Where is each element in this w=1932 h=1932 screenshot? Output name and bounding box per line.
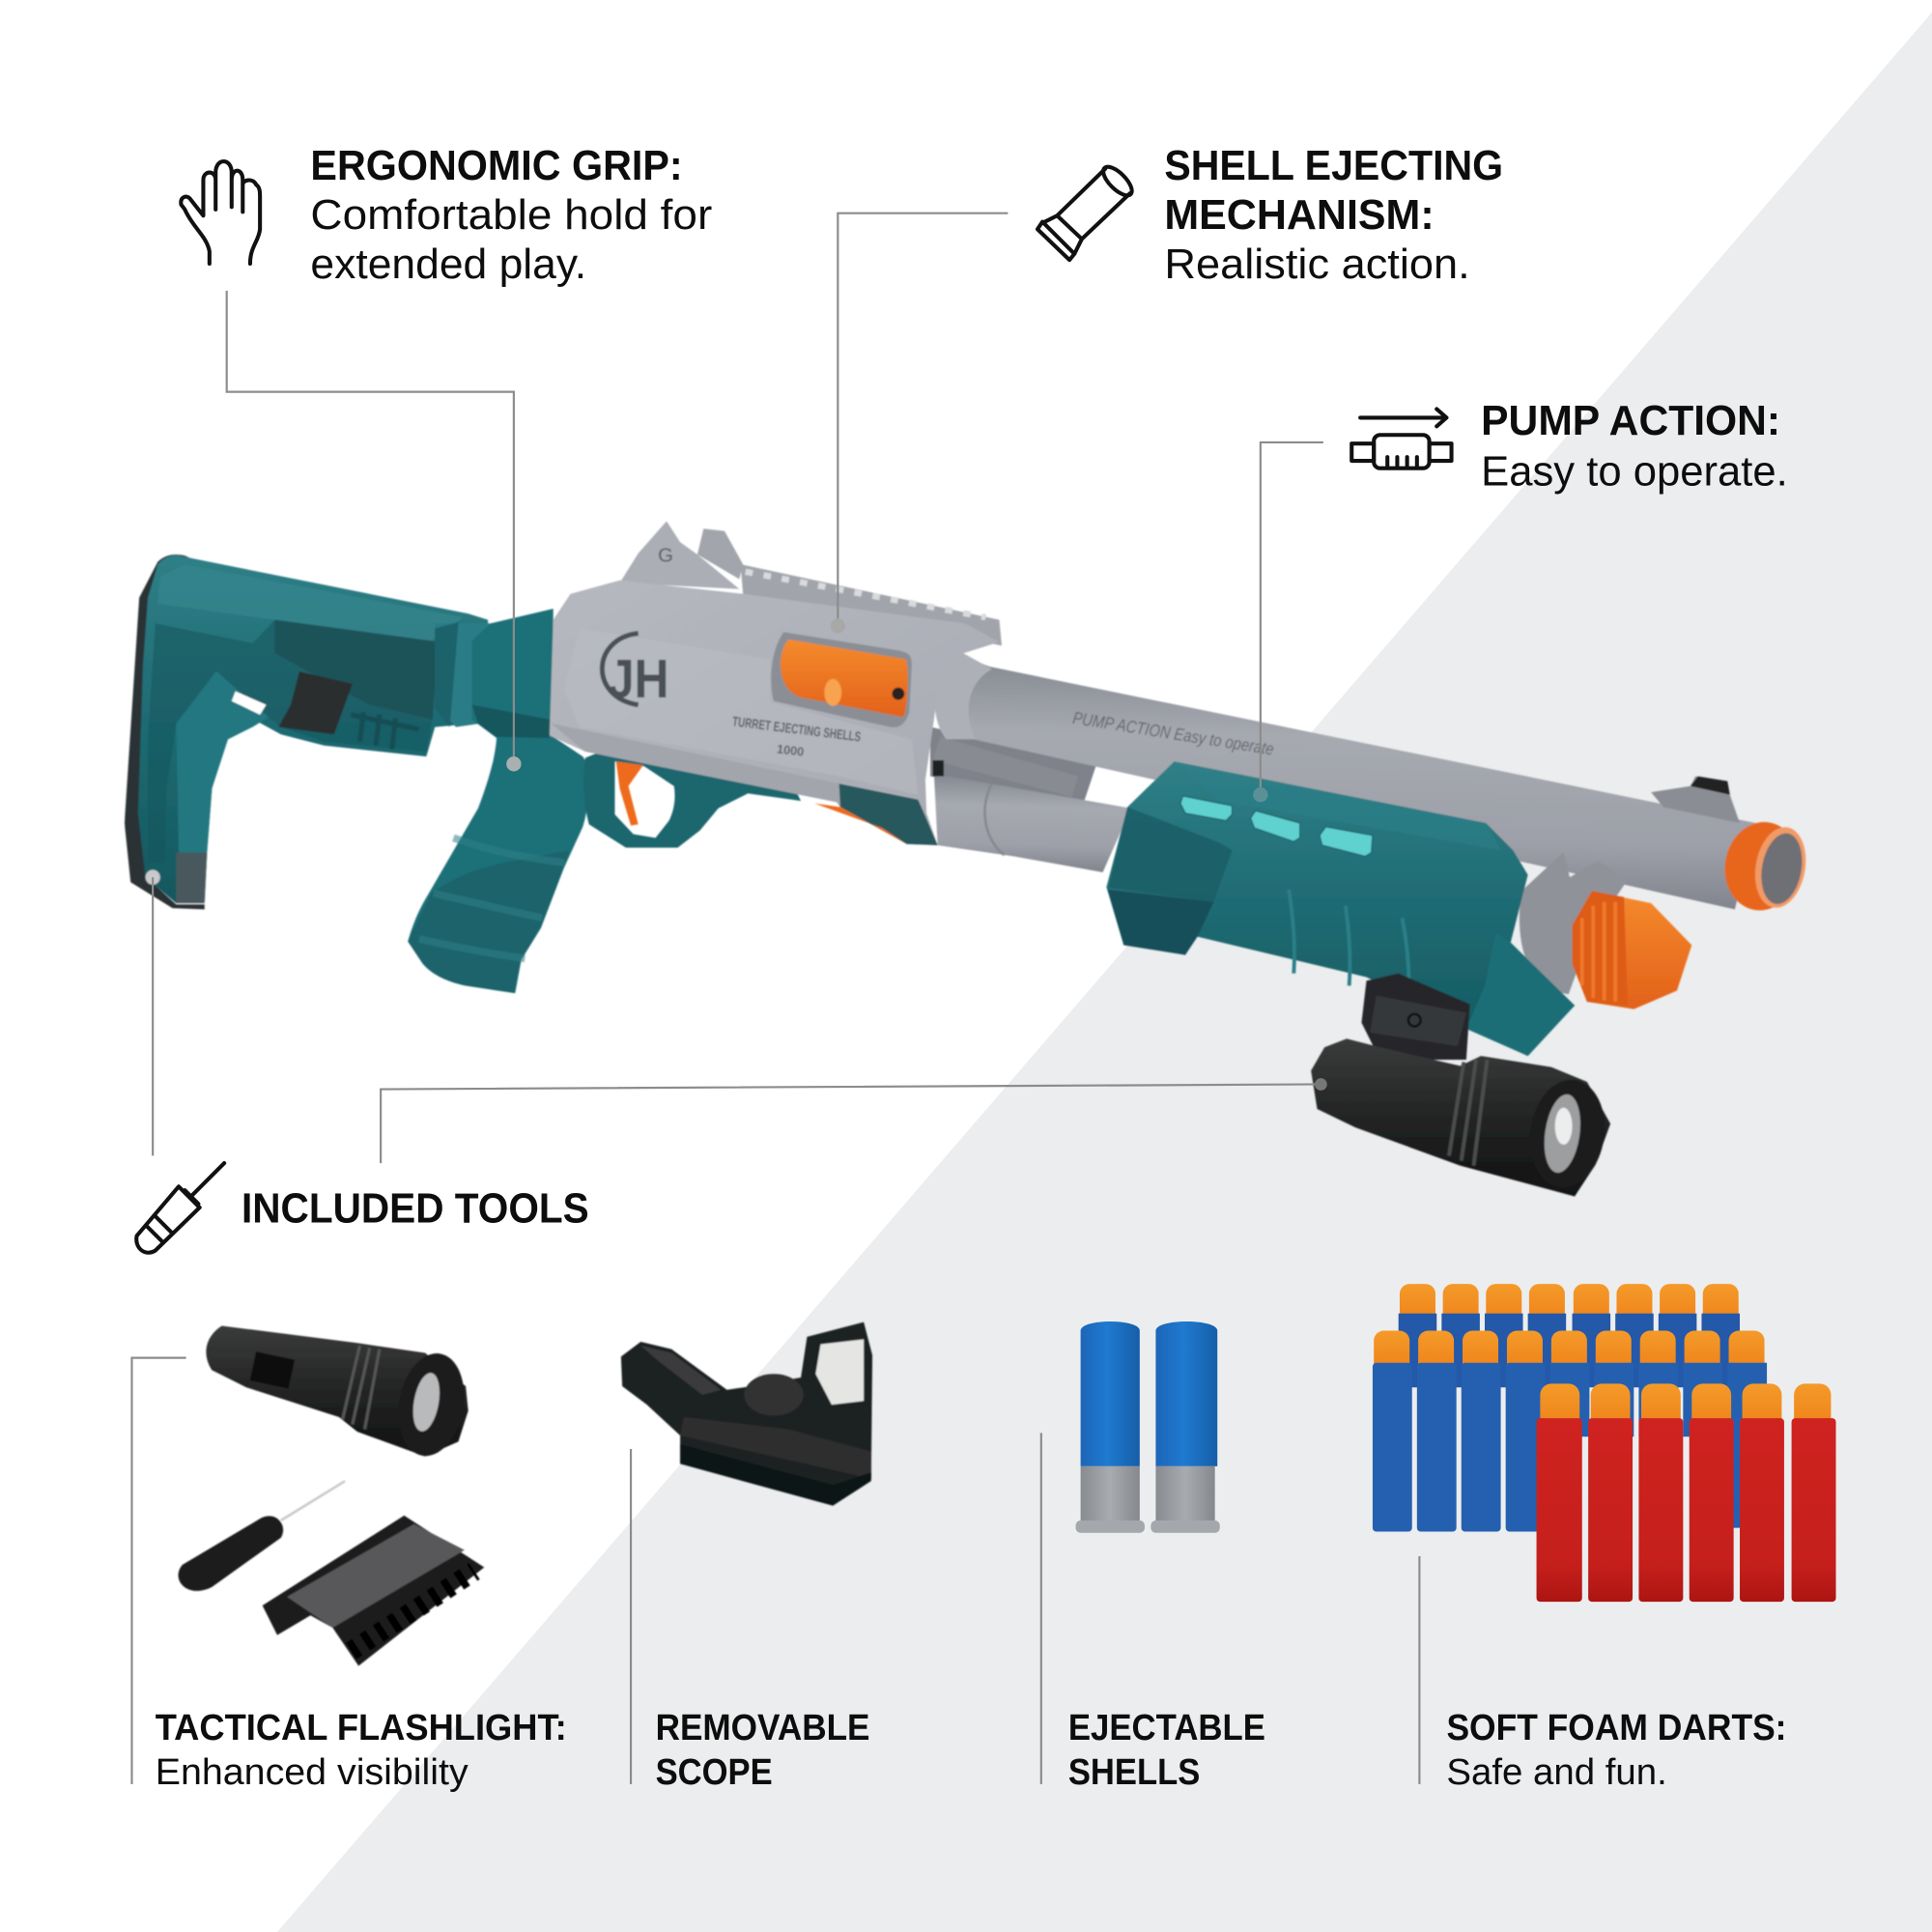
heading: included tools: INCLUDED TOOLS (242, 1185, 589, 1232)
callout: pump action (1481, 398, 1788, 496)
item: tactical flashlight (206, 1325, 471, 1462)
label: removable scope: REMOVABLE (656, 1707, 870, 1748)
logo: JH: JH (608, 648, 669, 709)
callout: shell ejecting mechanism: Realistic action. (1164, 242, 1470, 288)
item: screwdriver (179, 1481, 345, 1591)
label: removable scope (656, 1707, 870, 1793)
callout: pump action: Easy to operate. (1481, 449, 1788, 496)
stock back plate (125, 554, 210, 909)
callout: pump action: PUMP ACTION: (1481, 398, 1780, 444)
stock body (138, 555, 491, 903)
label: tactical flashlight: Enhanced visibility (156, 1751, 469, 1793)
barrel (935, 650, 1756, 909)
callout: ergonomic grip: extended play. (310, 242, 586, 288)
callout: shell ejecting mechanism: SHELL EJECTING (1164, 143, 1503, 189)
item: soft foam darts (1373, 1284, 1836, 1602)
receiver: 1000 (776, 741, 805, 759)
blaster (125, 522, 1812, 1197)
label: ejectable shells: EJECTABLE (1068, 1707, 1265, 1748)
pump forend (1106, 761, 1575, 1056)
label: tactical flashlight (156, 1707, 567, 1793)
label: soft foam darts: SOFT FOAM DARTS: (1446, 1707, 1786, 1748)
trigger guard (583, 746, 801, 848)
icon: shell (1037, 162, 1136, 260)
label: soft foam darts: Safe and fun. (1446, 1751, 1667, 1793)
stock (125, 554, 491, 909)
callout: shell ejecting mechanism (1164, 143, 1503, 288)
callout: shell ejecting mechanism: MECHANISM: (1164, 192, 1435, 239)
dark lower panel (839, 783, 938, 845)
callout: ergonomic grip: ERGONOMIC GRIP: (310, 143, 683, 189)
icon: screwdriver (136, 1163, 224, 1253)
lower magazine tube and rail (930, 727, 1131, 872)
item: removable scope (621, 1322, 872, 1506)
glowing windows (1180, 796, 1373, 856)
receiver: G (658, 546, 673, 567)
pistol grip and trigger (408, 609, 801, 993)
receiver: TURRET EJECTING SHELLS (731, 713, 862, 745)
item: mounting rail (263, 1516, 484, 1665)
item: ejectable shells (1076, 1321, 1220, 1533)
trigger (616, 761, 643, 826)
muzzle (1718, 816, 1812, 917)
front sight (1651, 777, 1740, 823)
ejection port (771, 632, 912, 727)
blue darts middle row (1373, 1331, 1767, 1531)
leader lines (131, 213, 1419, 1784)
barrel collar and orange knob (1520, 853, 1691, 1009)
callout: ergonomic grip: Comfortable hold for (310, 192, 712, 239)
label: ejectable shells (1068, 1707, 1265, 1793)
logo: JH (602, 634, 669, 709)
underbarrel flashlight (1311, 974, 1611, 1197)
blue darts back row (1399, 1284, 1740, 1387)
label: removable scope: SCOPE (656, 1751, 773, 1793)
label: ejectable shells: SHELLS (1068, 1751, 1200, 1793)
receiver (550, 522, 1002, 845)
label: tactical flashlight: TACTICAL FLASHLIGHT: (156, 1707, 567, 1748)
label: soft foam darts (1446, 1707, 1786, 1793)
icon: hand (181, 161, 260, 264)
red darts front row (1537, 1383, 1836, 1602)
callout: ergonomic grip (310, 143, 712, 288)
barrel: PUMP ACTION Easy to operate (1071, 708, 1275, 759)
orange fin (814, 804, 907, 844)
icon: pump action (1351, 409, 1452, 469)
